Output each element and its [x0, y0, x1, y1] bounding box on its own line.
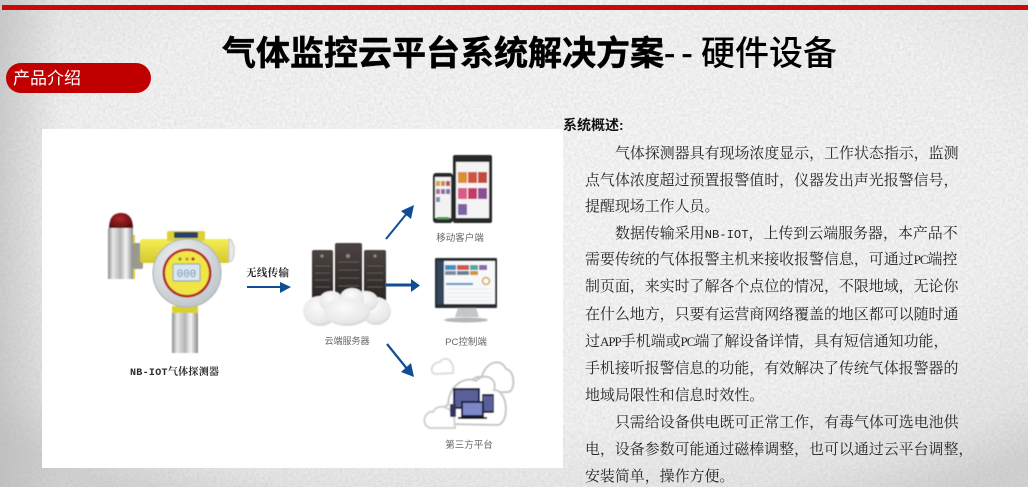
text block: system overview body: 需要传统的气体报警主机来接收报警信息，可通过PC端控 [585, 252, 957, 268]
label: third-party platform: 第三方平台 [445, 439, 493, 451]
arrow: to cloud server [247, 282, 291, 293]
label: detector name: NB-IOT气体探测器 [130, 365, 219, 379]
icon: gas detector: 000 [177, 269, 196, 281]
icon: mobile devices [433, 155, 492, 223]
arrow: to third-party platform [387, 344, 414, 377]
label: cloud server: 云端服务器 [324, 335, 370, 346]
text block: system overview body: 气体探测器具有现场浓度显示，工作状态指示，监测 [615, 146, 959, 162]
label: wireless transmission: 无线传输 [246, 266, 290, 279]
label: mobile client: 移动客户端 [436, 232, 484, 244]
text block: system overview body: 在什么地方，只要有运营商网络覆盖的地区都可以随时通 [585, 307, 958, 323]
text block: system overview body: 数据传输采用NB-IOT，上传到云端服务器，本产品不 [615, 226, 958, 242]
text block: system overview body: 只需给设备供电既可正常工作，有毒气体可选电池供 [615, 415, 959, 431]
text block: system overview body: 电，设备参数可能通过磁棒调整，也可以通过云平台调整， [585, 442, 973, 458]
text block: system overview body: 地域局限性和信息时效性。 [585, 388, 764, 404]
title: -- [664, 35, 699, 73]
text block: system overview body: 手机接听报警信息的功能，有效解决了传统气体报警器的 [585, 361, 958, 377]
icon: PC monitor [435, 258, 497, 322]
title: 气体监控云平台系统解决方案 硬件设备 [222, 35, 837, 73]
top red bar [2, 5, 1028, 10]
text block: system overview body: 过APP手机端或PC端了解设备详情，具有短信通知功能， [585, 334, 948, 350]
icon: gas detector [108, 213, 234, 353]
arrow: to mobile client [386, 205, 414, 239]
text block: system overview body [585, 145, 973, 485]
label: PC console: PC控制端 [445, 336, 487, 348]
arrow: to PC console [386, 279, 420, 292]
text block: system overview body: 制页面，来实时了解各个点位的情况，不限地域，无论你 [585, 279, 958, 295]
product intro badge: 产品介绍 [13, 69, 81, 88]
product intro badge [6, 63, 151, 93]
text block: system overview body: 提醒现场工作人员。 [585, 199, 719, 215]
text block: system overview body: 点气体浓度超过预置报警值时，仪器发出声光报警信号， [585, 173, 958, 189]
icon: cloud servers [303, 243, 391, 326]
text block: system overview body: 安装简单，操作方便。 [585, 469, 734, 485]
heading: system overview: 系统概述: [563, 117, 624, 133]
icon: third-party platform [424, 359, 513, 428]
panel: system diagram [42, 129, 563, 468]
